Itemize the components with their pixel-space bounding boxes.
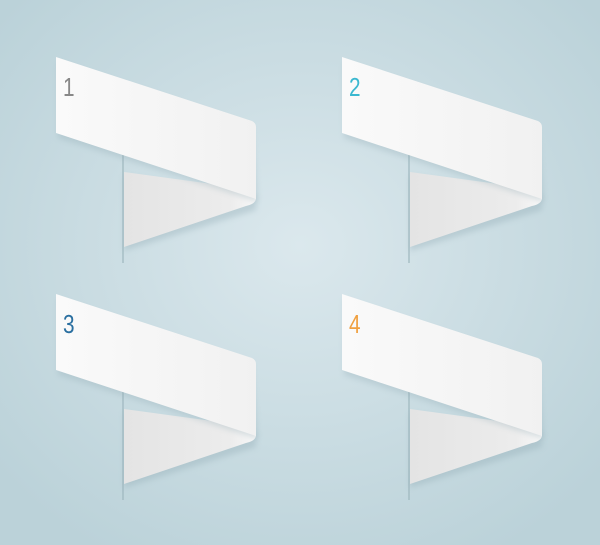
panel: ribbon 4 [342, 294, 544, 500]
panel: ribbon 3 [56, 294, 258, 500]
panel: ribbon 2 [342, 57, 544, 263]
panel: ribbon 1 [56, 57, 258, 263]
number 3: 3 [63, 310, 75, 339]
number 1: 1 [63, 73, 75, 102]
number 2: 2 [349, 73, 361, 102]
number 4: 4 [349, 310, 361, 339]
